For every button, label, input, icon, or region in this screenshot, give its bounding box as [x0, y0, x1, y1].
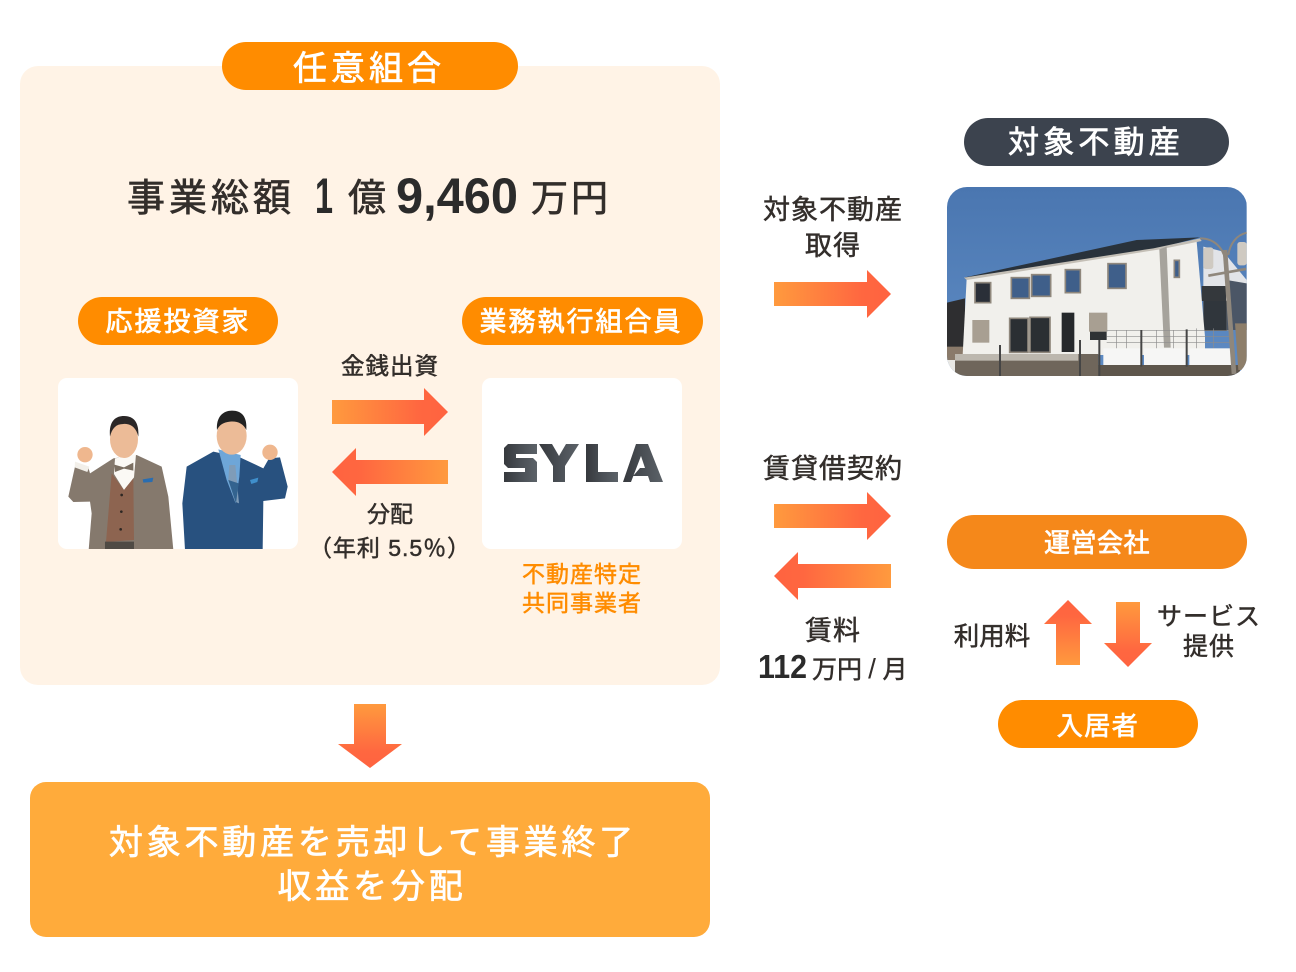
- arrow: 対象不動産取得: 対象不動産: [763, 195, 903, 225]
- total project amount: 9,460: [396, 168, 518, 224]
- left man: [68, 416, 173, 550]
- label: 業務執行組合員: 業務執行組合員: [480, 307, 682, 337]
- right wing: [1203, 247, 1247, 330]
- arrow: 賃料: /: [868, 653, 876, 684]
- caption: 不動産特定共同事業者: 共同事業者: [522, 590, 642, 616]
- label: 入居者: [998, 700, 1198, 748]
- fence and low wall: [1107, 328, 1230, 348]
- label: 応援投資家: [78, 297, 278, 345]
- arrow: down to result: [338, 704, 402, 768]
- heading: 対象不動産: 対象不動産: [1008, 125, 1184, 160]
- total project amount: 万円: [531, 178, 611, 219]
- heading: 任意組合: [222, 42, 518, 90]
- total project amount: 事業総額: [127, 178, 295, 220]
- caption: 不動産特定共同事業者: 不動産特定: [522, 561, 642, 587]
- label: 入居者: 入居者: [1057, 711, 1139, 741]
- arrow: 分配: （年利 5.5％）: [309, 535, 471, 561]
- arrow: 利用料: 利用料: [954, 623, 1030, 651]
- arrow: 賃料: 月: [882, 656, 908, 684]
- lamp post: [1225, 250, 1234, 374]
- logo card: SYLA: [482, 378, 682, 549]
- total project amount: 億: [348, 178, 386, 220]
- arrow: サービス提供: [1104, 602, 1261, 667]
- label: 応援投資家: 応援投資家: [106, 307, 250, 337]
- result box: 収益を分配: [278, 868, 466, 906]
- arrow: 対象不動産取得: [763, 195, 903, 318]
- panel: 任意組合: [20, 42, 720, 685]
- photo: investors: [58, 378, 298, 550]
- photo: apartment building: [947, 187, 1247, 377]
- arrow: 利用料: [954, 600, 1092, 665]
- total project amount: [127, 168, 611, 224]
- heading: 任意組合: 任意組合: [293, 50, 445, 88]
- result box: 対象不動産を売却して事業終了: [109, 824, 637, 862]
- total project amount: 1: [315, 168, 333, 224]
- arrow: 賃貸借契約: 賃貸借契約: [763, 454, 903, 484]
- left neighbour: [947, 298, 965, 350]
- heading: 対象不動産: [964, 118, 1229, 166]
- building wall: [963, 242, 1205, 355]
- arrow: 賃料: 112: [758, 648, 807, 685]
- caption: 不動産特定共同事業者: [522, 561, 642, 616]
- arrow: サービス提供: 提供: [1183, 633, 1235, 661]
- right man: [182, 411, 288, 550]
- arrow: 対象不動産取得: 取得: [805, 231, 861, 261]
- arrow: 金銭出資: [332, 353, 448, 436]
- label: 業務執行組合員: [462, 297, 703, 345]
- label: 運営会社: 運営会社: [1044, 528, 1150, 558]
- result box: [30, 782, 710, 937]
- arrow: 金銭出資: 金銭出資: [341, 353, 439, 379]
- logo mark: [504, 444, 663, 482]
- arrow: 賃料: [758, 552, 908, 685]
- windows: [975, 260, 1179, 303]
- arrow: 分配: 分配: [367, 501, 413, 527]
- arrow: 賃料: 万円: [812, 656, 862, 684]
- arrow: 賃貸借契約: [763, 454, 903, 540]
- arrow: 分配: [309, 448, 471, 561]
- label: 運営会社: [947, 515, 1247, 569]
- arrow: サービス提供: サービス: [1157, 603, 1261, 631]
- arrow: 賃料: 賃料: [805, 616, 861, 646]
